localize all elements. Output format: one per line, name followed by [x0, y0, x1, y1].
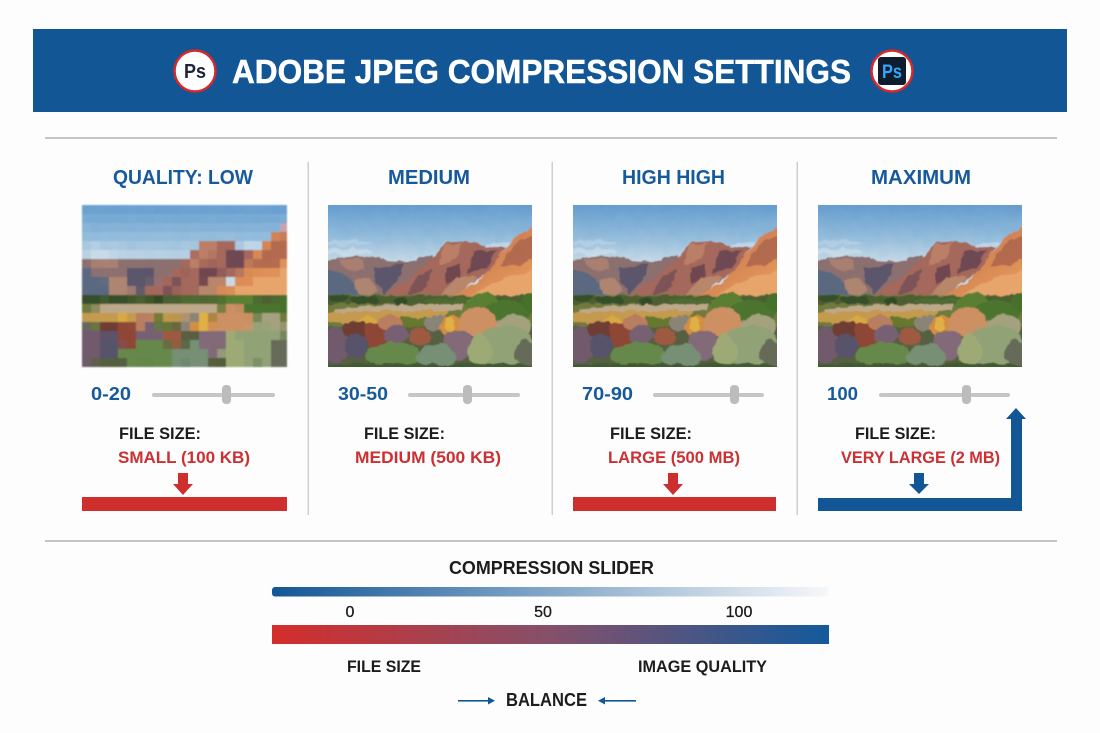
scale labels: 50 — [534, 604, 552, 621]
heading: high high: HIGH HIGH — [622, 167, 725, 189]
range label 0-20: 0-20 — [91, 384, 131, 404]
slider — [152, 385, 275, 404]
panel: quality low — [67, 167, 301, 511]
icon: Photoshop badge right — [872, 50, 912, 92]
file size label: FILE SIZE: — [364, 424, 445, 443]
image: landscape maximum quality — [803, 190, 1037, 382]
range label 100: 100 — [827, 384, 858, 404]
red bar — [573, 497, 776, 511]
heading: maximum: MAXIMUM — [871, 167, 971, 189]
red bar — [82, 497, 287, 511]
title banner — [33, 29, 1067, 112]
heading: medium: MEDIUM — [388, 167, 470, 189]
icon: Photoshop badge left: Ps — [184, 61, 206, 83]
image: landscape high quality — [558, 190, 792, 382]
elbow arrow up — [818, 408, 1026, 511]
file size value: SMALL (100 KB) — [118, 448, 250, 467]
file size label: FILE SIZE: — [855, 424, 936, 443]
icon: Photoshop badge right: Ps — [882, 62, 902, 83]
file size value: LARGE (500 MB) — [608, 448, 740, 467]
scale labels — [346, 604, 752, 621]
label: balance: BALANCE — [506, 690, 587, 710]
scale labels: 0 — [346, 604, 355, 621]
slider — [879, 385, 1010, 404]
arrow down — [663, 473, 683, 495]
title: ADOBE JPEG COMPRESSION SETTINGS — [232, 53, 851, 90]
arrow left — [598, 697, 636, 704]
range label 70-90: 70-90 — [582, 384, 633, 404]
file size label: FILE SIZE: — [119, 424, 201, 443]
heading: quality low: QUALITY: LOW — [113, 167, 253, 189]
arrow right — [458, 697, 495, 704]
heading: compression slider: COMPRESSION SLIDER — [449, 558, 654, 578]
icon: Photoshop badge left — [174, 50, 216, 92]
file size value: MEDIUM (500 KB) — [355, 448, 501, 467]
panel: maximum — [803, 167, 1037, 511]
panel: medium — [313, 167, 547, 467]
quality gradient bar — [272, 587, 829, 596]
panel: high — [558, 167, 792, 511]
compression slider section — [272, 558, 829, 710]
arrow down — [909, 473, 929, 494]
file size to quality gradient bar — [272, 625, 829, 644]
image: heavily pixelated landscape — [67, 190, 301, 382]
file size label: FILE SIZE: — [610, 424, 692, 443]
image: landscape medium quality — [313, 190, 547, 382]
label: image quality: IMAGE QUALITY — [638, 657, 768, 676]
arrow down — [173, 473, 193, 495]
file size value: VERY LARGE (2 MB) — [841, 448, 1000, 467]
slider — [408, 385, 520, 404]
slider — [653, 385, 764, 404]
label: file size: FILE SIZE — [347, 657, 421, 676]
range label 30-50: 30-50 — [338, 384, 388, 404]
scale labels: 100 — [726, 604, 752, 621]
